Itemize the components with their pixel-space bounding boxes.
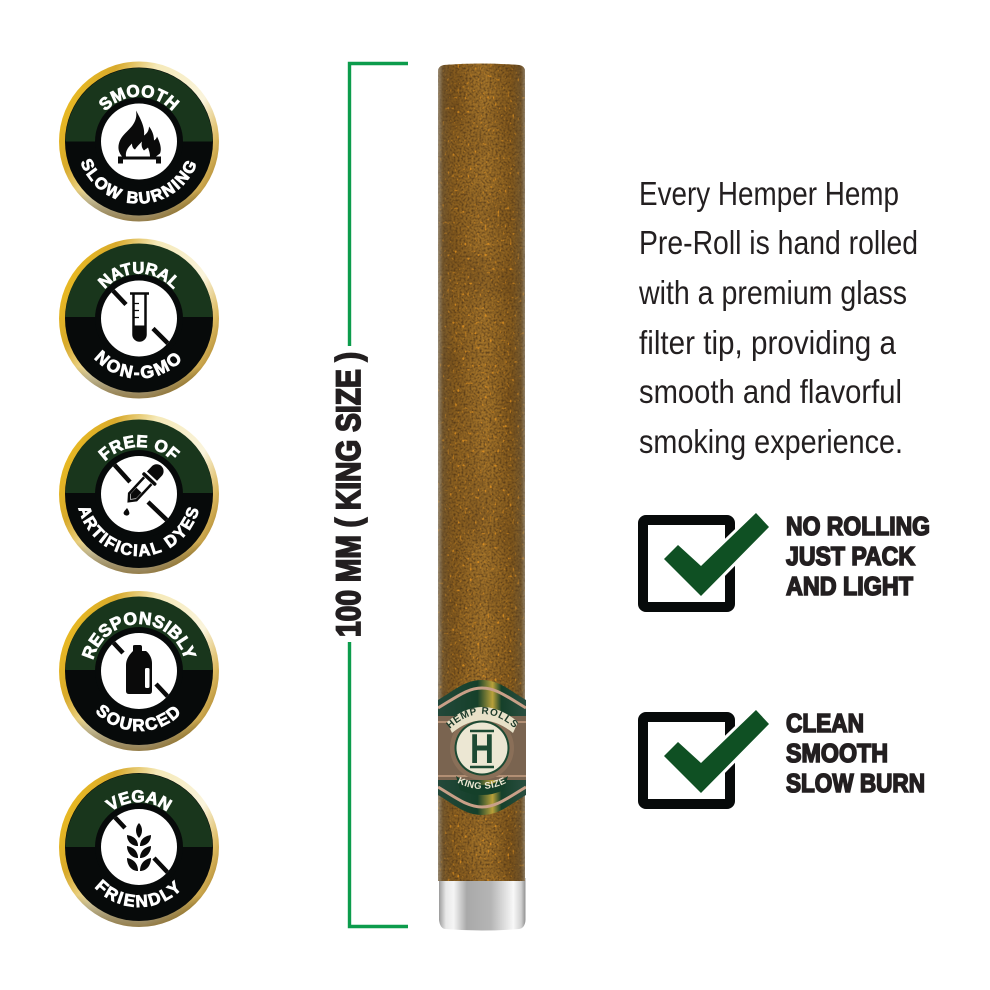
text block: product description: with a premium glass xyxy=(638,274,907,311)
icon: checkbox one xyxy=(643,513,769,607)
badge: natural non-gmo xyxy=(59,238,219,398)
text block: no rolling xyxy=(786,511,930,601)
icon: flame xyxy=(118,110,161,164)
label text: HEMP ROLLS: HEMP ROLLS xyxy=(446,707,518,728)
hemp paper body xyxy=(438,62,526,882)
badge text: ARTIFICIAL DYES: ARTIFICIAL DYES xyxy=(78,507,198,557)
product: hemp pre-roll tube xyxy=(438,64,526,930)
badge text: FRIENDLY: FRIENDLY xyxy=(94,878,180,908)
text block: clean smooth: SMOOTH xyxy=(786,738,888,768)
text block: product description: Pre-Roll is hand rolled xyxy=(639,224,918,261)
label: hemp rolls king size xyxy=(438,680,526,815)
badge text: VEGAN: VEGAN xyxy=(104,790,173,812)
text block: product description: smooth and flavorful xyxy=(639,373,902,410)
icon: checkbox two xyxy=(643,710,769,804)
badge text: NATURAL: NATURAL xyxy=(97,262,178,290)
icon: crossed test tube xyxy=(112,289,170,345)
text block: no rolling: JUST PACK xyxy=(786,541,915,571)
badge text: SOURCED: SOURCED xyxy=(96,704,180,732)
badge text: FREE OF: FREE OF xyxy=(98,434,180,462)
badge text: SMOOTH: SMOOTH xyxy=(99,84,180,111)
metal filter tip xyxy=(439,878,526,930)
text block: product description: smoking experience. xyxy=(639,423,903,460)
badge text: SLOW BURNING: SLOW BURNING xyxy=(81,158,196,204)
badge text: RESPONSIBLY: RESPONSIBLY xyxy=(81,611,197,660)
badge: vegan friendly xyxy=(59,767,219,927)
badge: smooth slow burning xyxy=(59,62,219,222)
icon: crossed bottle xyxy=(112,642,169,698)
text block: clean smooth: CLEAN xyxy=(786,708,864,738)
label text: H monogram: H xyxy=(470,725,494,772)
badge text: NON-GMO: NON-GMO xyxy=(94,350,180,378)
text block: clean smooth: SLOW BURN xyxy=(786,768,925,798)
bracket: 100 mm dimension line xyxy=(350,64,408,926)
text block: no rolling: AND LIGHT xyxy=(786,571,913,601)
text block: no rolling: NO ROLLING xyxy=(786,511,930,541)
icon: crossed dropper xyxy=(113,464,168,522)
text block: product description xyxy=(638,175,918,460)
text block: product description: Every Hemper Hemp xyxy=(639,175,899,212)
text block: clean smooth xyxy=(786,708,925,798)
dimension label: 100 MM ( KING SIZE ) xyxy=(330,352,368,637)
label text: KING SIZE: KING SIZE xyxy=(458,776,506,789)
icon: crossed wheat xyxy=(114,816,169,874)
badge: free of artificial dyes xyxy=(59,414,219,574)
badge: responsibly sourced xyxy=(59,591,219,751)
text block: product description: filter tip, providing a xyxy=(639,324,897,361)
